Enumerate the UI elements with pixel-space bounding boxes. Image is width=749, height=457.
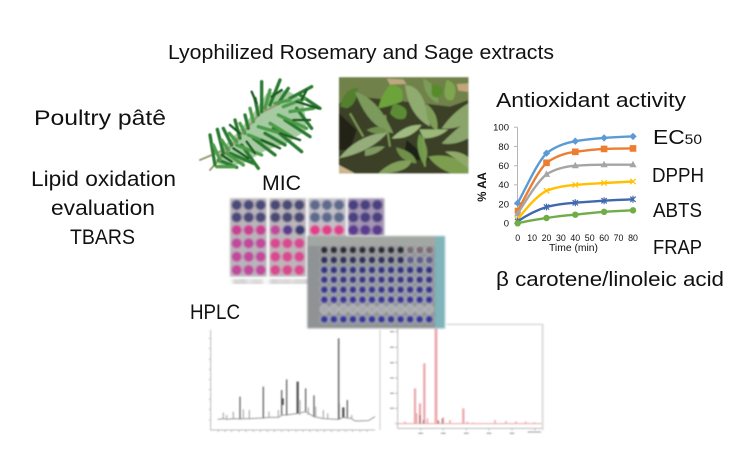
series: orange squares bbox=[515, 145, 636, 214]
labels: antioxidant assays: β carotene/linoleic acid bbox=[496, 268, 724, 291]
photo: MIC test strips bbox=[230, 198, 384, 277]
line chart: percent antioxidant activity over time: 80 bbox=[628, 233, 638, 243]
line chart: percent antioxidant activity over time: 0 bbox=[515, 233, 520, 243]
captions: test strip organisms: Bacillus cereus bbox=[233, 279, 264, 284]
labels: antioxidant assays: ABTS bbox=[653, 199, 702, 222]
line chart: percent antioxidant activity over time: 50 bbox=[585, 233, 595, 243]
chromatogram: HPLC sage bbox=[380, 324, 543, 433]
series: navy asterisks bbox=[515, 196, 636, 225]
line chart: percent antioxidant activity over time: 20 bbox=[542, 233, 551, 243]
labels: antioxidant assays: DPPH bbox=[652, 164, 704, 187]
line chart: percent antioxidant activity over time: 20 bbox=[498, 199, 509, 210]
series: gray triangles bbox=[514, 161, 637, 216]
series: green circles bbox=[514, 207, 636, 226]
captions: test strip organisms bbox=[233, 279, 313, 284]
line chart: percent antioxidant activity over time: 30 bbox=[556, 233, 566, 243]
line chart: percent antioxidant activity over time: 70 bbox=[614, 233, 623, 243]
label: HPLC: HPLC bbox=[190, 300, 240, 324]
labels: antioxidant assays bbox=[496, 126, 724, 291]
line chart: percent antioxidant activity over time: 100 bbox=[493, 123, 509, 134]
line chart: percent antioxidant activity over time: 40 bbox=[570, 233, 580, 243]
labels: antioxidant assays: EC50 bbox=[653, 126, 702, 149]
line chart: percent antioxidant activity over time: 10 bbox=[527, 233, 537, 243]
chart label: antioxidant activity: Antioxidant activity bbox=[496, 89, 687, 112]
title: Lyophilized Rosemary and Sage extracts bbox=[168, 41, 554, 64]
line chart: percent antioxidant activity over time: 40 bbox=[498, 180, 509, 191]
photo: sage plants bbox=[339, 77, 468, 173]
photo: rosemary sprig bbox=[200, 80, 320, 170]
label: MIC: MIC bbox=[262, 171, 301, 195]
line chart: percent antioxidant activity over time bbox=[477, 123, 638, 254]
series: yellow crosses bbox=[515, 179, 636, 222]
line chart: percent antioxidant activity over time: 80 bbox=[498, 142, 509, 153]
line chart: percent antioxidant activity over time: 60 bbox=[599, 233, 609, 243]
line chart: percent antioxidant activity over time: % AA bbox=[477, 172, 489, 202]
label: lipid oxidation evaluation TBARS: TBARS bbox=[70, 225, 135, 249]
label: lipid oxidation evaluation TBARS bbox=[31, 167, 176, 249]
line chart: percent antioxidant activity over time: 60 bbox=[498, 161, 509, 172]
label: lipid oxidation evaluation TBARS: evaluation bbox=[51, 196, 155, 220]
label: poultry pate: Poultry pâtê bbox=[34, 106, 166, 130]
series: EC50 blue diamonds bbox=[514, 133, 637, 207]
line chart: percent antioxidant activity over time: 0 bbox=[504, 219, 509, 230]
labels: antioxidant assays: FRAP bbox=[653, 236, 702, 259]
photo: 96-well microplate bbox=[307, 236, 445, 328]
chromatogram: HPLC rosemary bbox=[209, 330, 375, 432]
line chart: percent antioxidant activity over time: Time (min) bbox=[549, 243, 598, 254]
label: lipid oxidation evaluation TBARS: Lipid oxidation bbox=[31, 167, 176, 191]
captions: test strip organisms: Salmonela enteretidis bbox=[269, 279, 313, 284]
